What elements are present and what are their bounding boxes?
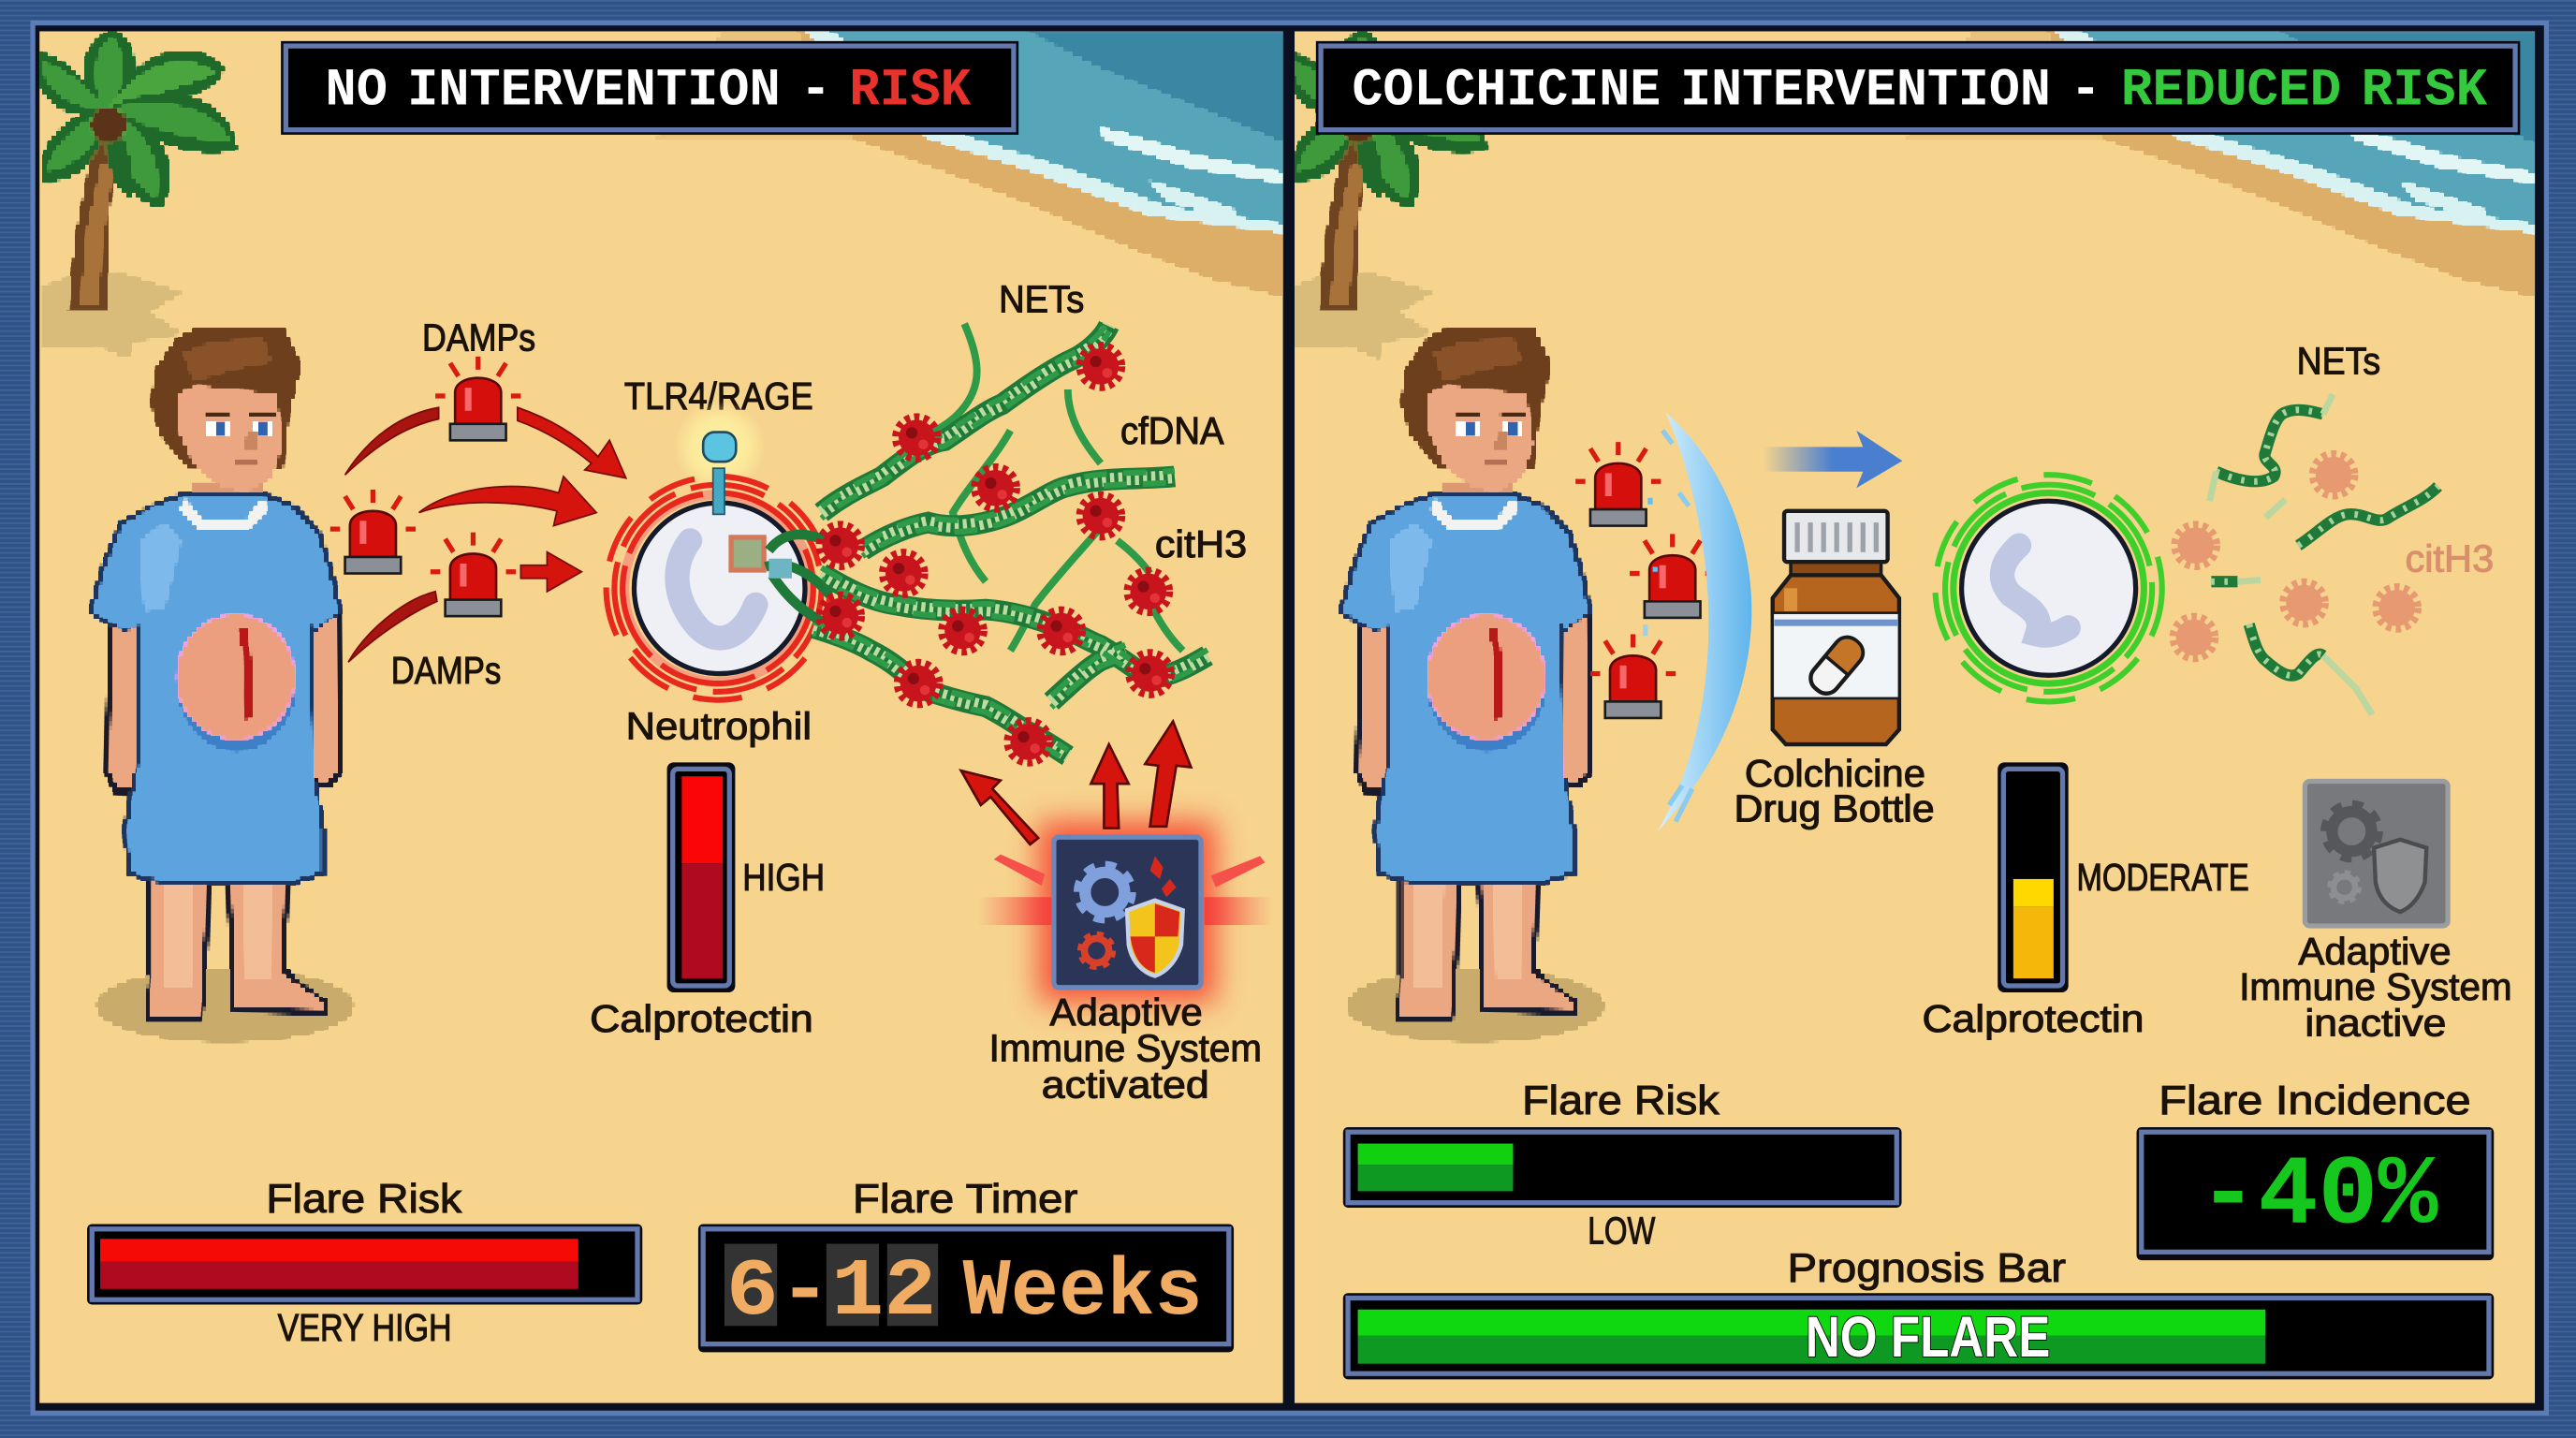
patient figure: right — [1339, 327, 1603, 1042]
arrows: immune system to NETs — [961, 721, 1191, 844]
label: adaptive immune system activated — [989, 990, 1262, 1106]
colchicine bottle — [1773, 511, 1899, 744]
siren lower — [431, 533, 516, 616]
label: cfDNA: cfDNA — [1120, 409, 1224, 452]
siren right top — [1575, 442, 1661, 526]
siren middle — [330, 490, 416, 574]
label: NETs right: NETs — [2297, 339, 2380, 382]
flare timer display — [698, 1224, 1234, 1352]
sand background right — [1295, 31, 2535, 1403]
label: moderate: MODERATE — [2076, 856, 2249, 899]
icon: adaptive immune system inactive — [2305, 782, 2448, 926]
arrow: drug action — [1763, 431, 1902, 488]
label: HIGH: HIGH — [742, 856, 825, 899]
label: prognosis bar: Prognosis Bar — [1788, 1245, 2066, 1291]
label: adaptive immune system inactive: inactive — [2305, 1002, 2446, 1045]
label: colchicine drug bottle: Drug Bottle — [1734, 787, 1935, 830]
label: adaptive immune system inactive: Adaptive — [2298, 930, 2452, 973]
label: citH3 faded: citH3 — [2405, 537, 2494, 580]
label: calprotectin: Calprotectin — [590, 997, 813, 1040]
label: NETs: NETs — [999, 277, 1084, 320]
siren top — [435, 357, 520, 440]
heading: colchicine intervention — [1316, 41, 2520, 135]
shield arc — [1643, 413, 1751, 831]
flare risk bar: very high — [87, 1224, 642, 1304]
icon: adaptive immune system activated — [977, 822, 1273, 1003]
label: TLR4/RAGE: TLR4/RAGE — [624, 374, 813, 418]
label: adaptive immune system inactive — [2239, 930, 2512, 1045]
NETs web — [766, 319, 1208, 761]
prognosis bar: no flare: NO FLARE — [1806, 1305, 2050, 1370]
label: DAMPs lower: DAMPs — [391, 649, 501, 692]
flare incidence display: -40% — [2198, 1140, 2438, 1253]
label: colchicine drug bottle — [1734, 752, 1935, 830]
neutrophil with receptor — [607, 401, 829, 700]
flare timer display: Weeks — [962, 1246, 1203, 1338]
label: colchicine drug bottle: Colchicine — [1745, 752, 1925, 795]
prognosis bar: no flare — [1343, 1293, 2494, 1379]
label: calprotectin right: Calprotectin — [1922, 997, 2144, 1040]
calprotectin gauge: high — [667, 762, 735, 992]
label: adaptive immune system activated: Immune System — [989, 1027, 1262, 1070]
flare risk bar: low — [1343, 1127, 1902, 1208]
siren right middle — [1630, 534, 1715, 618]
neutrophil calm — [1936, 475, 2162, 701]
heading: no intervention — [281, 41, 1018, 135]
label: very high: VERY HIGH — [278, 1306, 452, 1349]
label: DAMPs top: DAMPs — [422, 316, 535, 360]
label: citH3: citH3 — [1155, 522, 1247, 565]
label: adaptive immune system activated: Adaptive — [1050, 990, 1203, 1034]
label: adaptive immune system inactive: Immune System — [2239, 965, 2512, 1008]
arrows: DAMP signals — [345, 407, 626, 662]
flare incidence display — [2137, 1127, 2494, 1260]
degraded NETs — [2174, 394, 2438, 714]
sand background — [39, 31, 1283, 1403]
siren right lower — [1590, 634, 1676, 718]
label: flare risk right: Flare Risk — [1522, 1078, 1720, 1123]
patient figure: left — [89, 327, 353, 1042]
heading: colchicine intervention: REDUCED RISK — [2121, 60, 2488, 120]
flare timer display: 6-12 — [726, 1246, 936, 1338]
panel: no intervention — [36, 30, 1314, 1403]
beach scene with palm and ocean — [36, 30, 1314, 359]
label: flare incidence: Flare Incidence — [2159, 1078, 2471, 1123]
label: low: LOW — [1588, 1210, 1655, 1253]
calprotectin gauge: moderate — [1998, 762, 2069, 992]
label: adaptive immune system activated: activated — [1042, 1063, 1209, 1106]
label: flare risk left: Flare Risk — [266, 1176, 461, 1222]
label: flare timer: Flare Timer — [853, 1176, 1077, 1222]
beach scene right with palm and ocean — [1285, 30, 2565, 359]
heading: colchicine intervention: COLCHICINE INTERVENTION - — [1352, 60, 2101, 120]
heading: no intervention: NO INTERVENTION - — [326, 60, 831, 120]
label: neutrophil: Neutrophil — [626, 705, 812, 748]
heading: no intervention: RISK — [849, 60, 972, 120]
panel: colchicine intervention — [1285, 30, 2565, 1403]
